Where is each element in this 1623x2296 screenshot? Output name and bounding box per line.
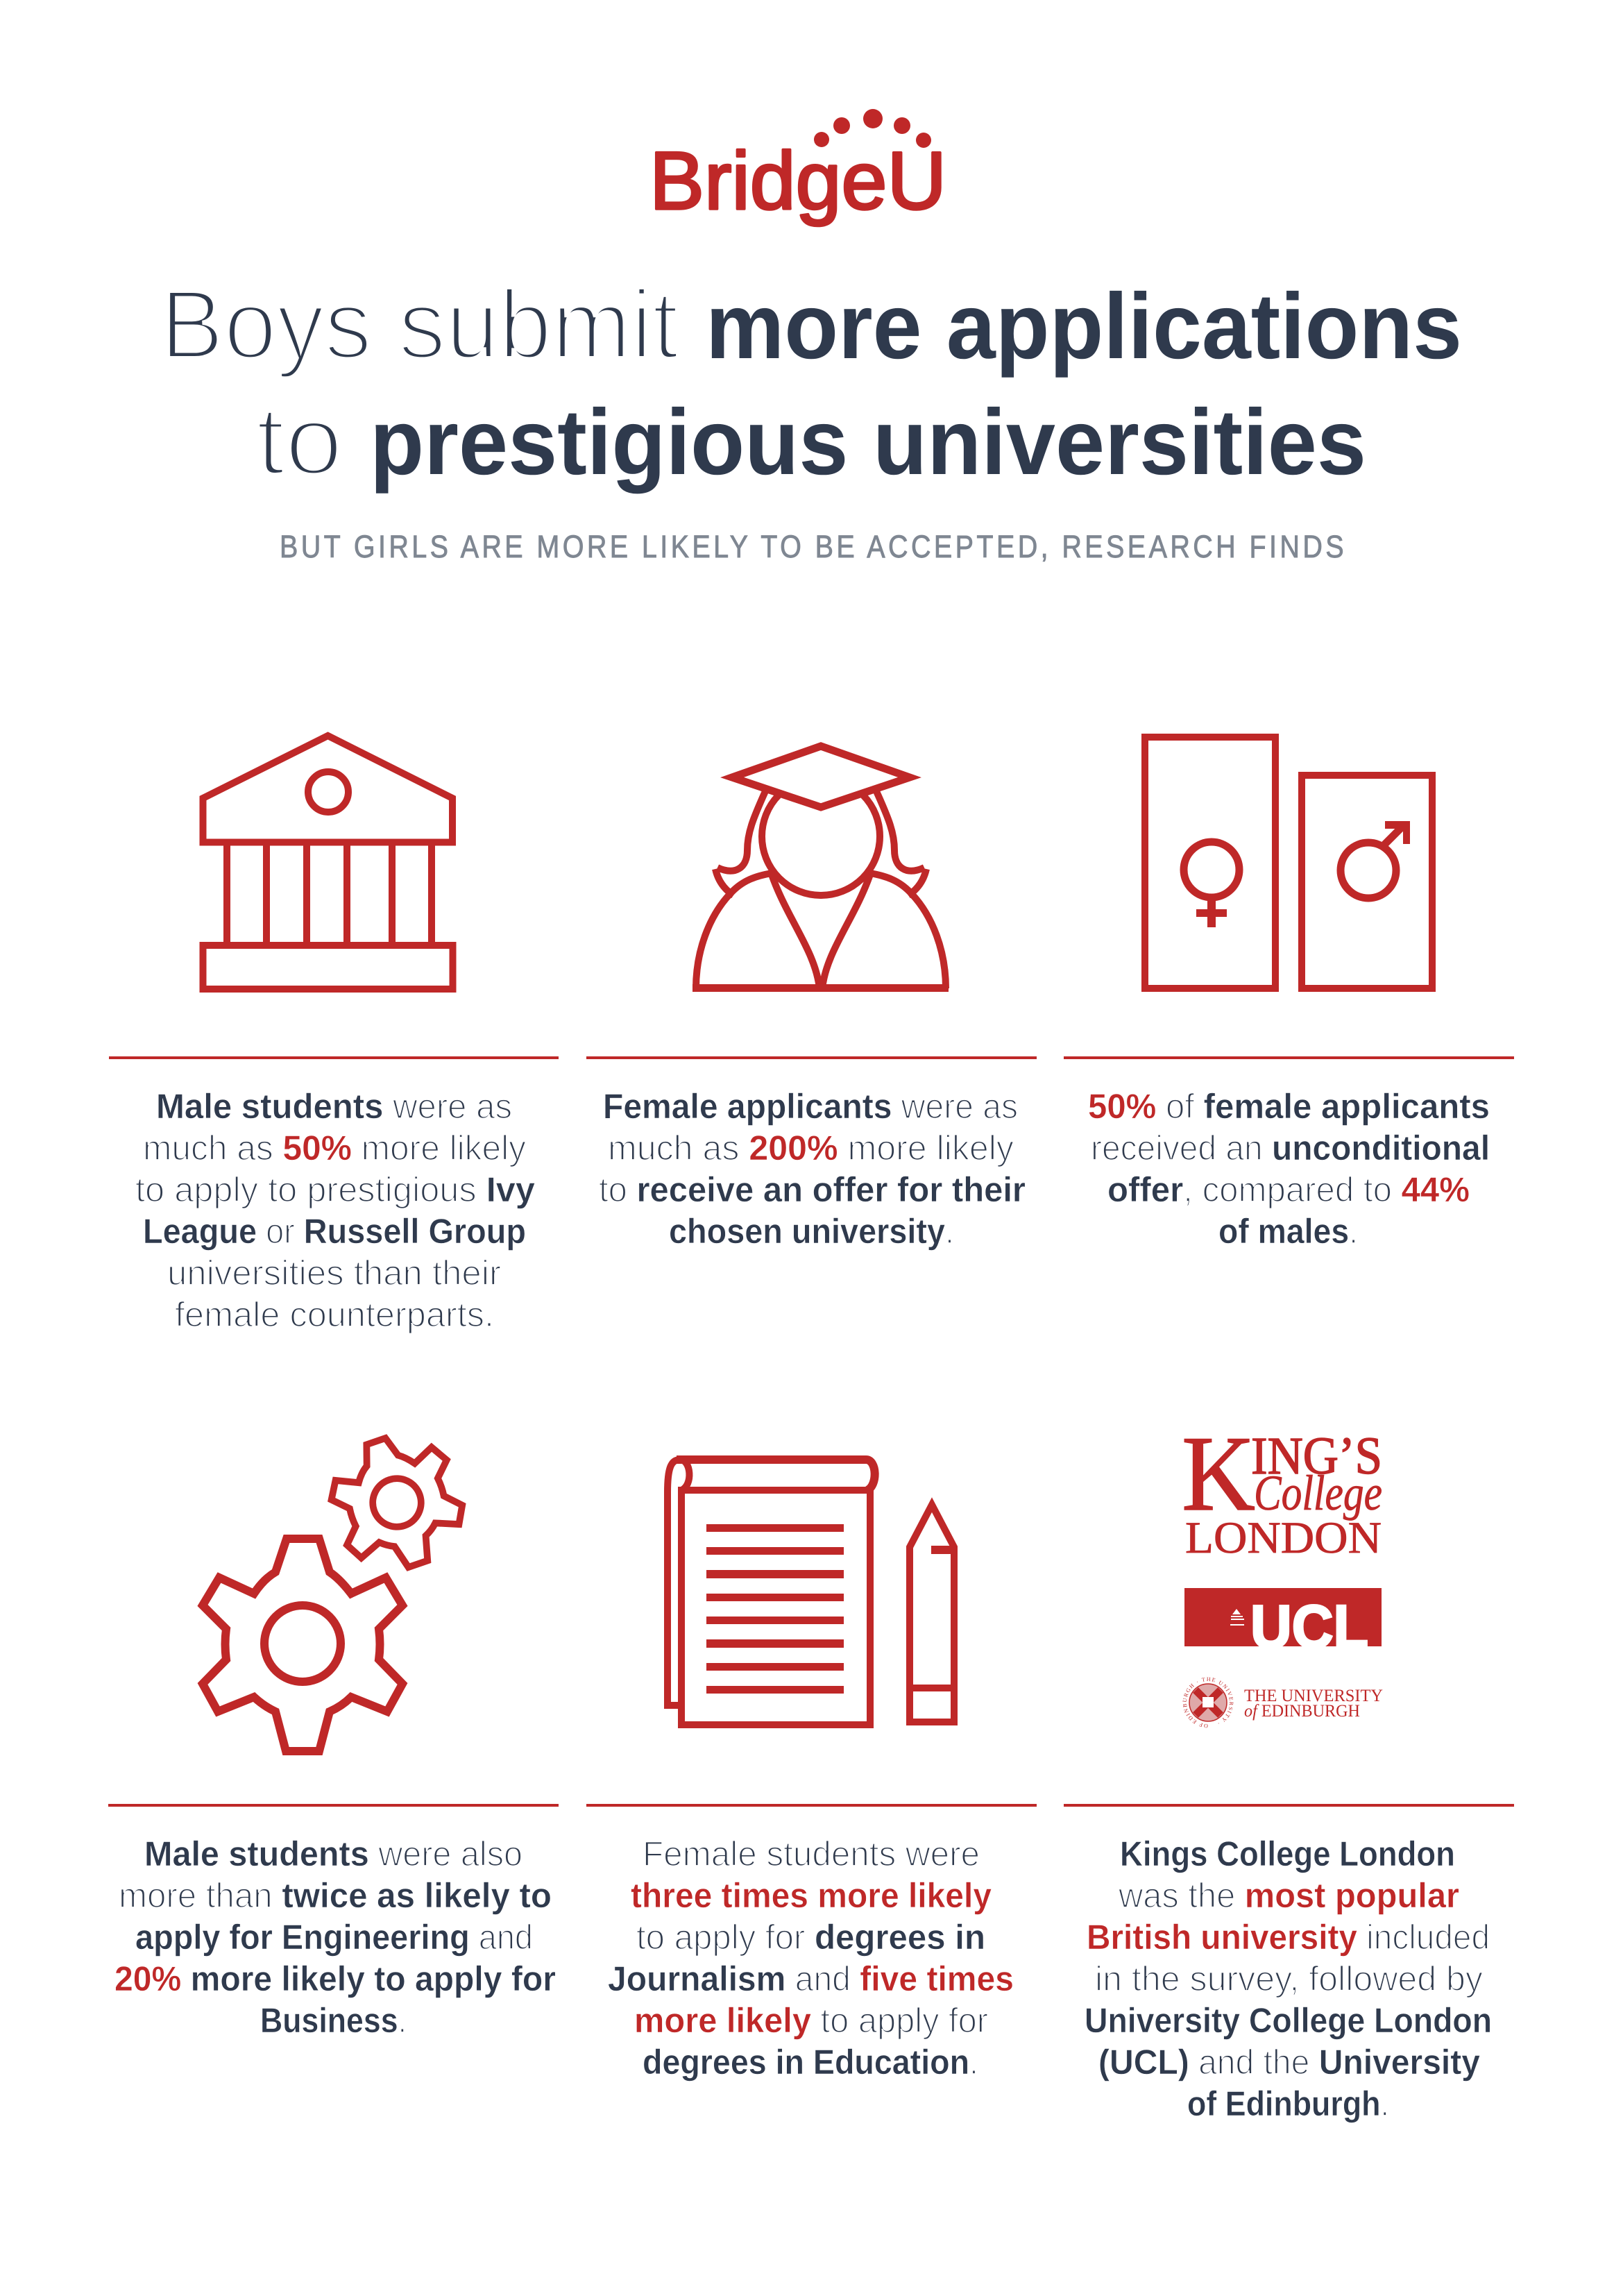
panel: male applications to prestigious universities — [109, 736, 559, 1334]
text: female students journalism: three times more likely — [631, 1876, 992, 1915]
text: male students engineering: apply for Engineering and — [135, 1918, 533, 1957]
logo: King's College London: ING’S — [1251, 1427, 1382, 1485]
logo: The University of Edinburgh: of EDINBURGH — [1244, 1702, 1360, 1721]
text: male students 50%: much as 50% more likely — [143, 1129, 526, 1167]
text: male students 50%: to apply to prestigious Ivy — [135, 1170, 535, 1209]
panel: journalism and education — [586, 1460, 1037, 2082]
text: Kings College London most popular: University College London — [1085, 2001, 1492, 2040]
icon: gender bars — [1145, 737, 1432, 988]
logo: The University of Edinburgh: OF EDINBURGH · THE UNIVERSITY · — [1182, 1677, 1234, 1728]
text: female students journalism — [608, 1834, 1014, 2082]
panel: female applicant offers — [586, 746, 1037, 1251]
logo: King's College London — [1182, 1414, 1382, 1563]
subtitle: BUT GIRLS ARE MORE LIKELY TO BE ACCEPTED, RESEARCH FINDS — [280, 529, 1347, 564]
panel: most popular universities — [1064, 1414, 1514, 2123]
text: 50% of female applicants: offer, compared to 44% — [1107, 1170, 1470, 1209]
text: male students 50%: Male students were as — [156, 1087, 512, 1126]
text: 50% of female applicants: 50% of female applicants — [1088, 1087, 1490, 1126]
panel: engineering and business — [108, 1421, 559, 2040]
logo: UCL: UCL — [1250, 1592, 1368, 1661]
logo: UCL — [1184, 1588, 1382, 1646]
text: male students engineering: Male students were also — [144, 1834, 522, 1873]
text: male students engineering — [114, 1834, 556, 2040]
text: male students 50%: League or Russell Group — [143, 1212, 526, 1251]
text: male students 50%: female counterparts. — [175, 1295, 494, 1334]
text: female students journalism: Female students were — [643, 1834, 980, 1873]
icon: female symbol — [1184, 842, 1239, 927]
text: female applicants 200%: Female applicants were as — [603, 1087, 1018, 1126]
text: male students 50% — [135, 1087, 535, 1334]
title: more applications — [706, 275, 1462, 378]
text: Kings College London most popular: was the most popular — [1118, 1876, 1459, 1915]
icon: gears — [203, 1421, 475, 1751]
text: 50% of female applicants: received an unconditional — [1091, 1129, 1490, 1167]
text: Kings College London most popular: British university included — [1087, 1918, 1490, 1957]
logo: King's College London: College — [1254, 1465, 1382, 1521]
icon: university building — [203, 736, 452, 989]
text: male students engineering: more than twice as likely to — [119, 1876, 552, 1915]
text: female applicants 200%: to receive an offer for their — [599, 1170, 1026, 1209]
logo: BridgeU: BridgeU — [649, 135, 946, 227]
text: 50% of female applicants: of males. — [1218, 1212, 1358, 1251]
text: female students journalism: Journalism and five times — [608, 1959, 1014, 1998]
text: female applicants 200% — [599, 1087, 1026, 1251]
title — [160, 269, 1462, 495]
text: female students journalism: to apply for degrees in — [636, 1918, 985, 1957]
title: to — [256, 385, 343, 495]
text: male students 50%: universities than their — [167, 1253, 501, 1292]
logo: King's College London: LONDON — [1185, 1513, 1382, 1563]
text: Kings College London most popular: of Edinburgh. — [1187, 2084, 1389, 2123]
icon: female graduate — [692, 746, 949, 988]
text: female students journalism: more likely to apply for — [634, 2001, 988, 2040]
text: female applicants 200%: much as 200% more likely — [608, 1129, 1014, 1167]
text: Kings College London most popular: Kings College London — [1120, 1834, 1455, 1873]
icon: male symbol — [1341, 821, 1410, 898]
logo: King's College London: K — [1182, 1414, 1255, 1533]
text: female applicants 200%: chosen university. — [669, 1212, 954, 1251]
text: Kings College London most popular: (UCL) and the University — [1098, 2043, 1480, 2082]
title: prestigious universities — [370, 391, 1366, 494]
text: male students engineering: 20% more likely to apply for — [114, 1959, 556, 1998]
text: female students journalism: degrees in Education. — [643, 2043, 978, 2082]
text: Kings College London most popular — [1085, 1834, 1492, 2123]
title: Boys submit — [160, 269, 679, 379]
panel: unconditional offers — [1064, 737, 1514, 1251]
text: Kings College London most popular: in the survey, followed by — [1095, 1959, 1483, 1998]
logo: The University of Edinburgh — [1182, 1677, 1383, 1728]
text: male students engineering: Business. — [260, 2001, 407, 2040]
text: 50% of female applicants — [1088, 1087, 1490, 1251]
icon: notepad and pencil — [668, 1460, 954, 1725]
logo: The University of Edinburgh: THE UNIVERSITY — [1244, 1687, 1383, 1705]
